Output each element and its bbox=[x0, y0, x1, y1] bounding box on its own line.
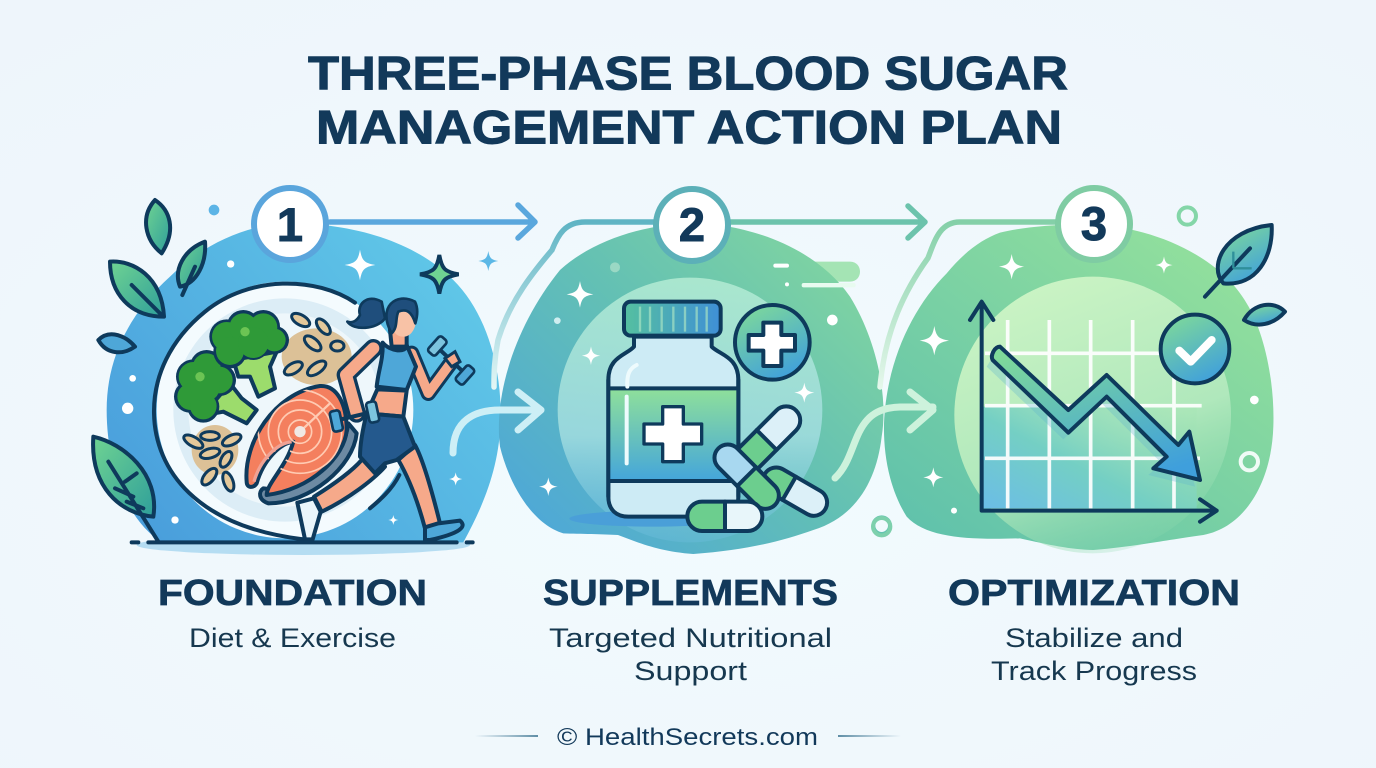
neck and head bbox=[390, 330, 407, 347]
upper dumbbell bbox=[427, 335, 475, 386]
badge 2 bbox=[656, 189, 728, 261]
connector: badge 2 back curve bbox=[494, 222, 655, 387]
label: optimization: Track Progress bbox=[991, 656, 1197, 686]
blob: blue background bbox=[107, 223, 501, 543]
midriff bbox=[367, 389, 407, 417]
plate bbox=[154, 282, 413, 539]
grid lines bbox=[985, 320, 1202, 508]
front shoe bbox=[425, 521, 463, 540]
inner circle bbox=[954, 277, 1231, 553]
badge 3 bbox=[1058, 188, 1130, 260]
trend arrow shadow bbox=[987, 353, 1195, 487]
shorts bbox=[360, 413, 415, 473]
title: MANAGEMENT ACTION PLAN bbox=[316, 102, 1062, 154]
far arm bbox=[412, 353, 452, 393]
check badge bbox=[1161, 315, 1229, 383]
back shoe bbox=[297, 498, 321, 539]
badge 3: 3 bbox=[1081, 197, 1107, 250]
panel: foundation illustration bbox=[93, 200, 501, 555]
axes bbox=[970, 302, 1217, 522]
badge 1 bbox=[254, 188, 326, 260]
title bbox=[308, 48, 1068, 154]
cap bbox=[624, 302, 721, 336]
sparkles and dots bbox=[122, 205, 498, 525]
grains: lower bbox=[182, 425, 243, 493]
leaves bbox=[93, 200, 205, 542]
title: THREE-PHASE BLOOD SUGAR bbox=[308, 48, 1068, 100]
ground line bbox=[132, 536, 473, 548]
grains: upper bbox=[282, 311, 352, 385]
chart area fill bbox=[983, 407, 1197, 508]
back leg bbox=[314, 460, 385, 512]
arrow: phase 1 to phase 2 bbox=[453, 392, 541, 453]
label: foundation bbox=[158, 572, 427, 653]
label: optimization: Stabilize and bbox=[1005, 623, 1183, 653]
label: supplements: Support bbox=[634, 656, 748, 686]
badge 2: 2 bbox=[679, 198, 705, 251]
ground shadow band bbox=[137, 535, 470, 555]
broccoli: upper bbox=[209, 310, 289, 397]
label: supplements: Targeted Nutritional bbox=[549, 623, 832, 653]
label: foundation: Diet & Exercise bbox=[189, 623, 396, 653]
inner circle bbox=[558, 278, 822, 542]
plus badge bbox=[735, 305, 810, 380]
label: foundation: FOUNDATION bbox=[158, 572, 427, 613]
label: optimization: OPTIMIZATION bbox=[948, 572, 1240, 613]
ring bbox=[873, 517, 890, 534]
front leg bbox=[398, 445, 440, 528]
label: supplements: SUPPLEMENTS bbox=[543, 572, 838, 613]
plus on label bbox=[644, 407, 702, 462]
hair bbox=[347, 299, 417, 333]
bottle bbox=[608, 302, 738, 517]
sparkles, dots and rings bbox=[873, 207, 1259, 535]
leaves bbox=[1205, 225, 1285, 325]
salmon steak bbox=[246, 386, 357, 503]
runner bbox=[297, 299, 475, 540]
sparkles and dots bbox=[539, 262, 856, 496]
panel: optimization illustration bbox=[873, 207, 1285, 553]
broccoli: lower bbox=[174, 350, 257, 423]
bottle shadow bbox=[569, 511, 737, 527]
blob: green background bbox=[884, 225, 1273, 550]
label bbox=[608, 388, 738, 480]
panel: supplements illustration bbox=[499, 223, 890, 554]
badge 1: 1 bbox=[277, 198, 303, 251]
footer: © HealthSecrets.com bbox=[557, 724, 818, 751]
top bbox=[377, 343, 416, 390]
trend arrow bbox=[992, 347, 1200, 480]
arrow: phase 2 to phase 3 bbox=[835, 392, 933, 478]
connector: badge 2 to arrow bbox=[730, 206, 925, 238]
capsules bbox=[687, 401, 832, 531]
connector: badge 3 back curve bbox=[880, 222, 1056, 387]
lower dumbbell bbox=[329, 401, 380, 432]
label: supplements bbox=[543, 572, 838, 686]
label: optimization bbox=[948, 572, 1240, 686]
connector: badge 1 to arrow bbox=[330, 205, 535, 238]
blob: teal background bbox=[499, 223, 884, 554]
chart bbox=[970, 302, 1217, 522]
near arm bbox=[346, 348, 373, 413]
decorative green tab bbox=[810, 262, 860, 282]
